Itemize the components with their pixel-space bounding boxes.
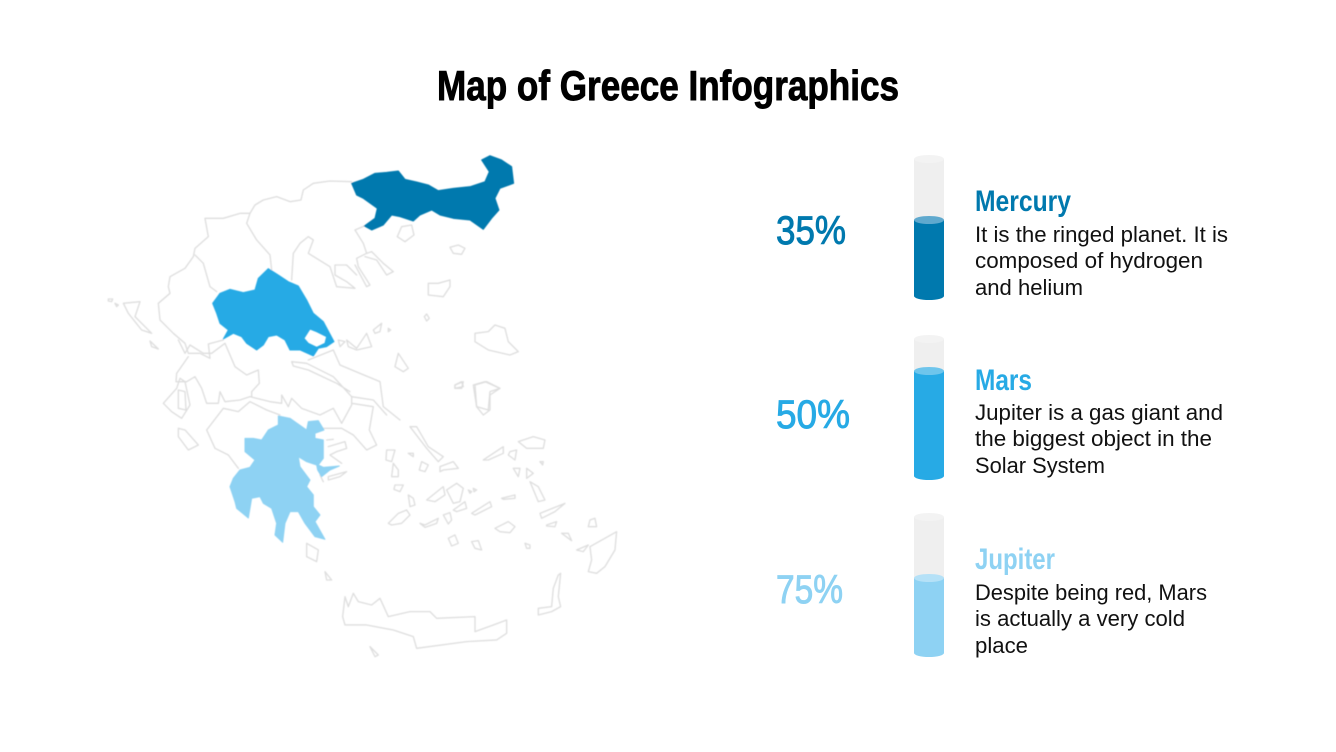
heading: Mercury: Mercury xyxy=(975,185,1071,218)
cylinder: 50% xyxy=(914,335,944,480)
map outline: southern Greece and islands xyxy=(307,382,617,657)
cylinder: 35% xyxy=(914,155,944,300)
region: Thessaly xyxy=(213,269,334,356)
description: Mercury: composed of hydrogen xyxy=(975,248,1203,273)
row: Mercury xyxy=(776,155,1228,300)
row: Jupiter xyxy=(776,513,1207,658)
description: Mars: Jupiter is a gas giant and xyxy=(975,400,1223,425)
heading: Jupiter: Jupiter xyxy=(975,543,1055,576)
description: Jupiter xyxy=(975,580,1207,658)
description: Jupiter: Despite being red, Mars xyxy=(975,580,1207,605)
description: Mercury: and helium xyxy=(975,275,1083,300)
region: East Macedonia and Thrace xyxy=(352,156,514,230)
map of Greece xyxy=(108,156,617,657)
description: Mercury xyxy=(975,222,1228,300)
percentage: 50%: 50% xyxy=(776,393,850,437)
description: Mars: Solar System xyxy=(975,453,1105,478)
map outline: northern Greece xyxy=(108,181,518,410)
percentage: 75%: 75% xyxy=(776,568,843,612)
map outline: central Greece xyxy=(163,340,400,482)
region: Peloponnese xyxy=(230,416,339,542)
description: Mars xyxy=(975,400,1223,478)
description: Jupiter: place xyxy=(975,633,1028,658)
heading: Mars: Mars xyxy=(975,364,1032,397)
percentage: 35%: 35% xyxy=(776,209,846,253)
row: Mars xyxy=(776,335,1223,480)
description: Jupiter: is actually a very cold xyxy=(975,606,1185,631)
title: Map of Greece Infographics xyxy=(437,62,899,109)
description: Mars: the biggest object in the xyxy=(975,426,1212,451)
cylinder: 75% xyxy=(914,513,944,657)
description: Mercury: It is the ringed planet. It is xyxy=(975,222,1228,247)
